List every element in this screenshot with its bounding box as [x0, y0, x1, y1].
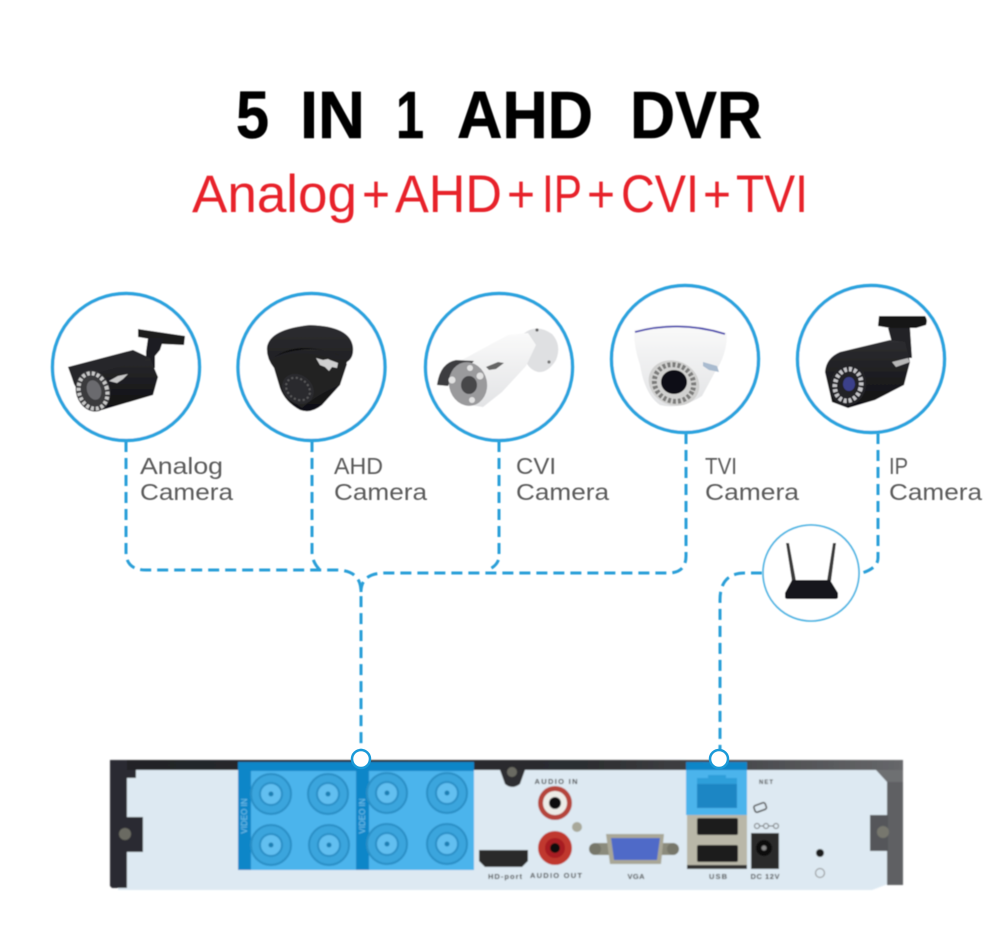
port labels: HD-port [488, 872, 522, 881]
title: 5 [236, 78, 269, 153]
connector node: BNC [352, 750, 370, 768]
subtitle: Analog [192, 165, 357, 224]
BNC input panel [238, 762, 474, 870]
DVR body [118, 766, 888, 890]
label: Analog Camera [140, 453, 233, 505]
switch glyph [753, 802, 767, 813]
port labels: NET [759, 780, 773, 786]
label: Analog Camera: Camera [140, 479, 233, 505]
port labels: AUDIO OUT [530, 871, 582, 880]
label: TVI Camera: Camera [705, 479, 799, 505]
label: IP Camera: Camera [889, 479, 982, 505]
subtitle: + [587, 165, 615, 224]
camera panel: TVI camera [612, 286, 758, 432]
BNC connectors [251, 773, 467, 865]
audio in jack [538, 786, 572, 820]
DVR metal frame [110, 760, 903, 888]
title: IN [300, 78, 365, 153]
label: TVI Camera [705, 453, 799, 505]
subtitle: TVI [736, 165, 808, 224]
label: AHD Camera: Camera [334, 479, 427, 505]
icon: IP bullet camera [825, 316, 927, 410]
power symbol [754, 824, 778, 828]
USB ports [687, 815, 747, 869]
label: Analog Camera: Analog [140, 453, 223, 479]
subtitle [192, 165, 808, 224]
audio out jack [538, 831, 572, 865]
port labels: AUDIO IN [534, 777, 578, 786]
label: CVI Camera [516, 453, 609, 505]
DC power jack [751, 833, 779, 869]
title [236, 78, 762, 153]
subtitle: AHD [395, 165, 502, 224]
camera panel: CVI camera [426, 294, 572, 440]
port labels: DC 12V [750, 872, 780, 881]
screws [119, 828, 131, 840]
connection lines: analog, AHD, CVI and TVI cameras to BNC inputs [126, 433, 686, 750]
camera panel: AHD camera [238, 294, 385, 440]
ground hole [816, 849, 824, 857]
camera panel: IP camera [798, 286, 944, 432]
label: CVI Camera: Camera [516, 479, 609, 505]
label: AHD Camera: AHD [334, 453, 383, 479]
VGA port [589, 834, 679, 864]
camera panel: analog camera [52, 294, 200, 440]
icon: AHD dome camera [267, 325, 353, 411]
title: 1 [396, 78, 424, 153]
connector node: NET [710, 750, 728, 768]
BNC input panel: VIDEO IN [240, 798, 249, 834]
HDMI port [479, 850, 528, 867]
subtitle: + [703, 165, 731, 224]
label: AHD Camera [334, 453, 427, 505]
icon: TVI white dome camera [634, 325, 727, 414]
icon: analog bullet camera [68, 329, 185, 416]
port labels: USB [709, 872, 728, 881]
BNC input panel: VIDEO IN [358, 798, 367, 834]
subtitle: IP [542, 165, 582, 224]
icon: CVI bullet camera [437, 328, 558, 409]
port labels [488, 777, 780, 881]
label: TVI Camera: TVI [705, 453, 737, 479]
icon: router [785, 543, 838, 599]
title: AHD [457, 78, 593, 153]
label: IP Camera [889, 453, 982, 505]
title: DVR [630, 78, 762, 153]
subtitle: CVI [621, 165, 699, 224]
DVR rear panel [110, 760, 903, 890]
label: IP Camera: IP [889, 453, 908, 479]
label: CVI Camera: CVI [516, 453, 556, 479]
subtitle: + [362, 165, 390, 224]
port labels: VGA [628, 872, 645, 881]
connection line: IP camera to router to NET port [720, 433, 878, 750]
subtitle: + [507, 165, 535, 224]
router panel [763, 525, 859, 621]
NET port panel [686, 762, 747, 815]
